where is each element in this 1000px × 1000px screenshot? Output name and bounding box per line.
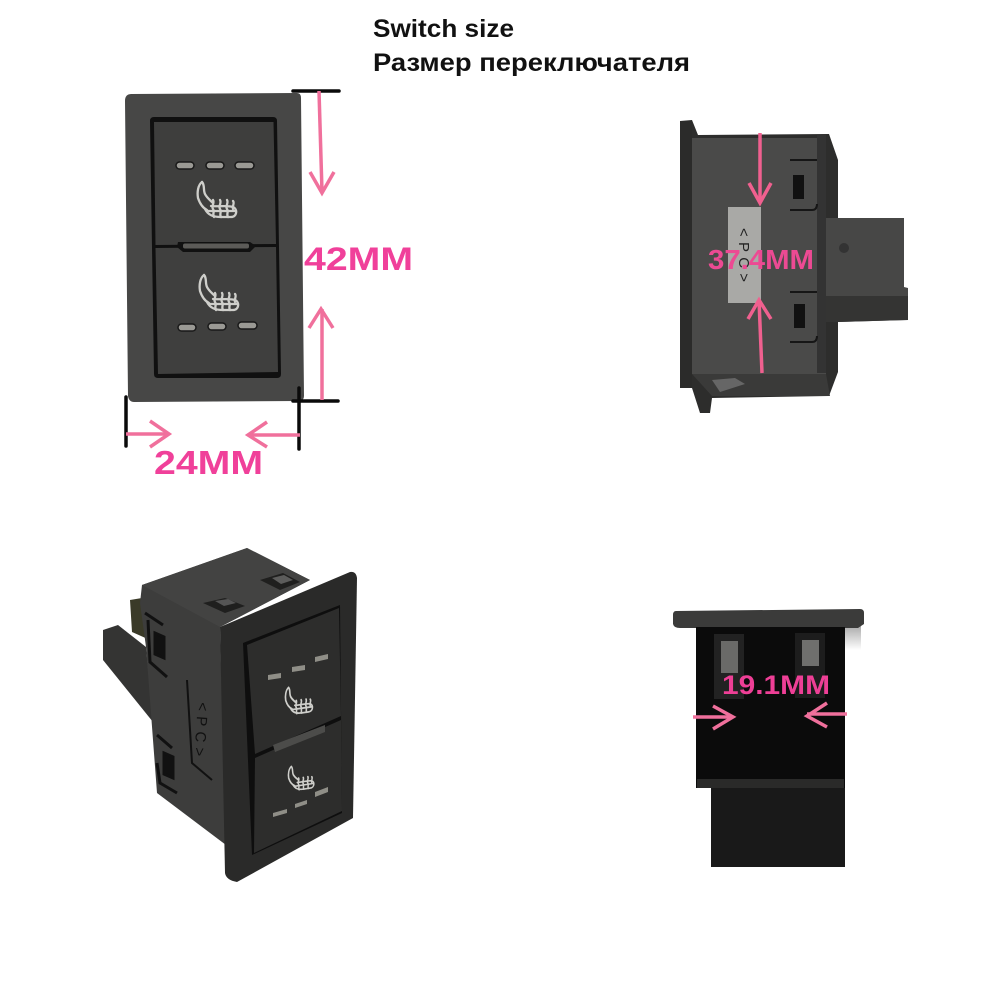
- connector: [711, 788, 845, 867]
- switch flange: [673, 609, 864, 628]
- connector notches: [145, 613, 212, 793]
- switch body: [696, 627, 845, 788]
- indicator lights top: [176, 162, 254, 169]
- title: [373, 15, 690, 77]
- button ridge: [273, 725, 325, 752]
- icon: heated seat top: [198, 182, 236, 217]
- switch body side: [140, 548, 310, 845]
- panel: side view with dimension: [680, 120, 908, 413]
- connector rear piece: [130, 598, 150, 640]
- switch side body: [680, 120, 908, 413]
- icon: heated seat lower: [288, 763, 314, 791]
- front bezel: [220, 572, 357, 882]
- panel: front view with dimensions: [125, 91, 413, 481]
- slots: [714, 633, 825, 699]
- body base strip: [697, 779, 844, 788]
- label: 42MM: 42MM: [304, 241, 413, 277]
- panel: perspective view: [103, 548, 357, 882]
- arrows: height and width: [126, 91, 334, 447]
- arrows: 37.4mm: [748, 133, 771, 373]
- button recess: [243, 605, 342, 855]
- clips: [203, 598, 245, 613]
- top button: [247, 608, 341, 754]
- switch front bezel: [125, 93, 304, 402]
- title: Switch size: [373, 15, 514, 43]
- connector: [103, 625, 153, 722]
- flange shadow: [845, 625, 861, 650]
- label: 37.4MM: 37.4MM: [708, 244, 814, 275]
- label: 19.1MM: 19.1MM: [722, 670, 830, 700]
- arrows: 19.1mm: [693, 703, 847, 729]
- marking: <PC>: [735, 228, 752, 282]
- icon: heated seat bottom: [200, 275, 238, 310]
- bottom button: [254, 720, 342, 853]
- label: 24MM: 24MM: [154, 444, 263, 481]
- indicator lights bottom: [178, 322, 257, 331]
- markings: <PC>: [190, 702, 211, 757]
- dimension tick lines: [126, 91, 339, 449]
- panel: top view with dimension: [673, 609, 864, 867]
- indicator lights: [268, 654, 328, 817]
- title: Размер переключателя: [373, 49, 690, 77]
- icon: heated seat upper: [285, 684, 312, 715]
